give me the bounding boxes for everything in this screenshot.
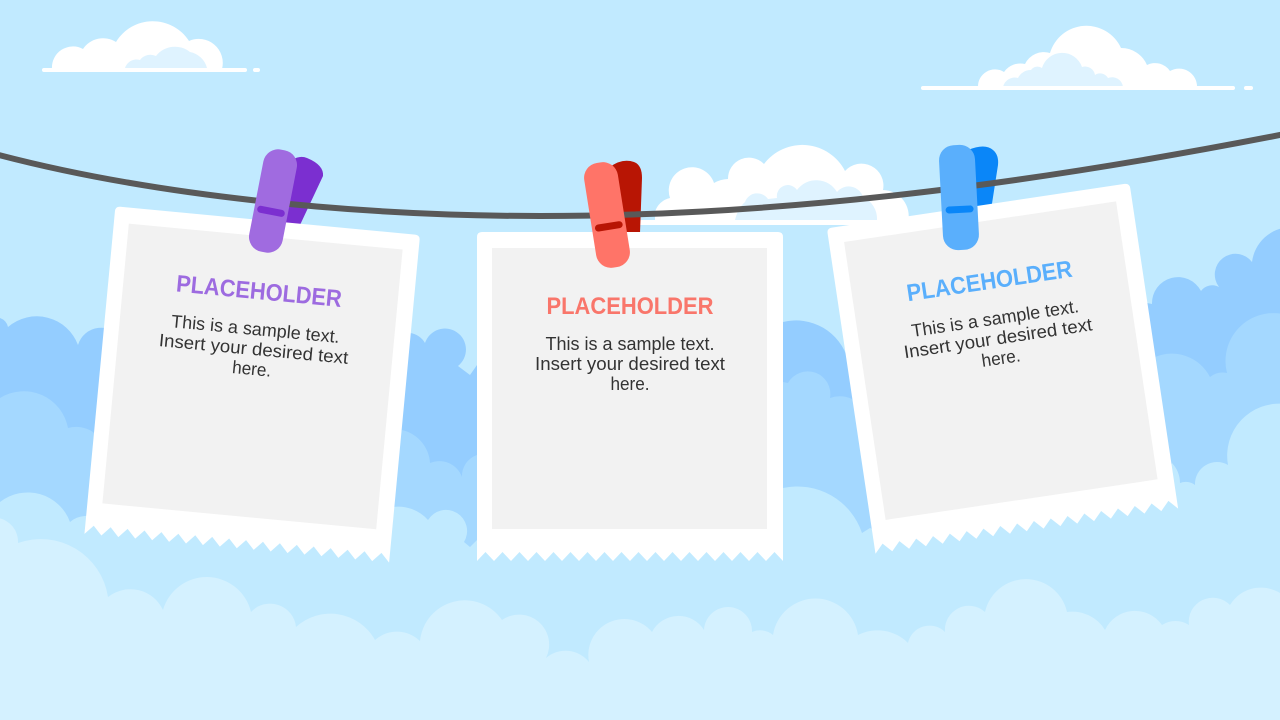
clip front: blue [938, 144, 980, 251]
card 2 body text [535, 334, 725, 394]
card 1 heading: PLACEHOLDER [175, 270, 343, 313]
card 1 photo area [102, 224, 403, 529]
card 2 frame [477, 232, 783, 561]
cloud layer: darkest blue [0, 227, 1280, 720]
card 1 body text [156, 310, 351, 388]
card 3 photo area [844, 201, 1158, 520]
card 2 body text: here. [610, 374, 650, 394]
clip back: blue [968, 146, 998, 210]
card 2 photo area [492, 248, 767, 529]
card 3 body text: here. [980, 345, 1022, 371]
card 3 body text: Insert your desired text [903, 314, 1093, 362]
cloud: top left [42, 21, 260, 72]
cloud layer: pale blue [0, 404, 1280, 720]
card 3 heading: PLACEHOLDER [905, 256, 1074, 307]
card 1 frame [84, 206, 420, 563]
card 3 body text: This is a sample text. [910, 296, 1080, 341]
card 1 body text: Insert your desired text [158, 330, 349, 368]
card 2: red [477, 232, 783, 561]
card 3: blue [827, 183, 1178, 554]
cloud: centre behind rope [634, 145, 909, 225]
card 1 body text: here. [231, 357, 272, 381]
card 2 heading: PLACEHOLDER [546, 293, 714, 320]
cloud layer: mid blue [0, 313, 1280, 720]
card 2 body text: This is a sample text. [546, 334, 714, 354]
clip front: red [582, 160, 632, 270]
card 1 body text: This is a sample text. [170, 311, 341, 347]
clothesline rope [0, 134, 1280, 216]
cloud layer: lightest foreground [0, 518, 1280, 720]
clip back: purple [282, 157, 323, 225]
card 3 body text [900, 295, 1096, 382]
card 1: purple [84, 206, 420, 563]
card 3 frame [827, 183, 1178, 554]
clip back: red [610, 161, 642, 233]
cloud: top right [921, 26, 1253, 90]
card 2 body text: Insert your desired text [535, 354, 725, 374]
clip front: purple [246, 147, 300, 255]
